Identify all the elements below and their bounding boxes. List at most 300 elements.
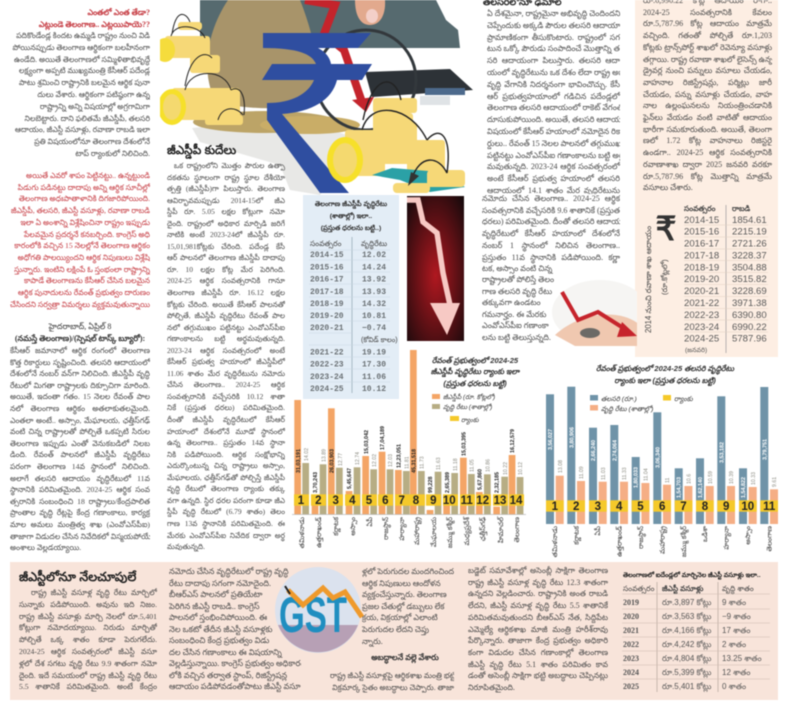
rank numbers: 10 [443, 495, 456, 507]
rank numbers: 3 [332, 495, 339, 507]
rows: 2015-16 [684, 227, 719, 238]
text block: per capita article continued: సంవత్సరానికి వచ్చేసరికి 9.6 శాతానికే (ప్రస్తుత [482, 206, 620, 215]
text block: intro paragraph: లక్ష్యంగా అప్పటి ముఖ్యమంత్రి కేసీఆర్ పదేండ్ల [19, 66, 150, 75]
text block: GST column four: డంతో అసెంబ్లీ సాక్షిగా భట్టి అబద్ధాలు చెప్పినట్లు [468, 671, 608, 680]
table rows: 13.25 శాతం [722, 654, 762, 663]
rank bands [546, 500, 778, 512]
icon: rupee glyph: ₹ [656, 210, 676, 247]
growth values: 11.05 [470, 459, 476, 472]
growth values: 10.33 [751, 472, 757, 485]
table rows: 2 శాతం [722, 640, 746, 649]
text block: red critique paragraph: అధోగతి పాలయ్యిందని ఆర్థిక నిపుణులు విశ్లేషి [18, 253, 150, 262]
table rows: 17 శాతం [722, 626, 750, 635]
table rows: 14.32 [362, 300, 386, 309]
legend: తలసరి (రూ.) [601, 396, 637, 403]
growth values: 11.63 [436, 457, 442, 470]
table rows: 11.06 [362, 373, 386, 382]
text block: transport revenue: వచ్చింది. గతంతో పోల్చితే రూ.1,203 [643, 31, 772, 40]
text block: transport revenue: వసూలు చేశారు. [643, 183, 693, 192]
text block: GST column four: నిరూపితమైంది. [468, 683, 515, 692]
rank numbers: 9 [723, 501, 729, 513]
per capita values: 1,54,822 [741, 477, 747, 498]
text block: per capita article continued: నంబర్ 1 స్థానంలో నిలిచిన తెలంగాణ.. [482, 241, 620, 250]
rows [684, 215, 767, 345]
GSDP values: 17,04,189 [380, 426, 386, 450]
rank numbers: 5 [637, 501, 644, 513]
rows: 2019-20 [684, 274, 719, 285]
rows: 6990.22 [732, 322, 767, 333]
text block: main article column one: అలాగే తలసరి ఆదాయం వృద్ధిరేటులో 11వ [10, 474, 150, 483]
text block: GSDP article: నికే (ప్రస్తుత ధరలు) పరిమితమైంది. [167, 403, 285, 412]
vertical caption: 2014 నుంచి రవాణా శాఖ ఆదాయం [644, 226, 653, 333]
text block: main article column one: రేటులో మిగతా రాష్ట్రాలకు దిక్సూచిగా మారింది. [10, 381, 150, 390]
table rows: 2024-25 [310, 385, 344, 394]
text block: GSDP article: నలో తగ్గుముఖం పట్టినట్టు ఎంవోఎస్‌పీఐ [167, 323, 285, 332]
text block: red critique paragraph: అయితే ఎవరో శాపం పెట్టినట్టు.. ఉన్నట్టుండి [26, 171, 150, 180]
text block: GST column four: లేదని, జీఎస్టీ వసూళ్ల వృద్ధి రేటు 5.5 శాతానికే [468, 601, 608, 610]
heading: GSDP rank chart title: జీఎస్డీపీ వృద్ధిరేటు ర్యాంకు ఇలా [431, 367, 519, 376]
text block: main article column one: అయితే, ఇదంతా గతం. 15 నెలల రేవంత్ పాల [10, 392, 150, 401]
per capita values: 3,56,027 [548, 429, 554, 450]
legend: వృద్ధి రేటు (శాతాల్లో) [443, 403, 493, 412]
text block: GST column one: రాష్ట్ర జీఎస్టీ వసూళ్లు మార్చి నెలలో రూ.5,401 [19, 612, 157, 621]
text block: GSDP article: ఎదుర్కొంటున్న చిన్న రాష్ట్రాలు అస్సాం, [167, 461, 285, 470]
text block: GSDP article: స్డీపీ రూ. 5.05 లక్షల కోట్లుగా నమో [167, 207, 285, 216]
text block: per capita article continued: నమోదు చేసిన తెలంగాణ.. 2024-25 ఆర్థిక [482, 194, 620, 203]
text block: transport revenue: డ్రైవర్ల నుంచి పన్నులు వసూలు చేయడం, [643, 66, 772, 75]
header: రాబడి [732, 204, 751, 213]
state labels [299, 516, 521, 548]
text block: GSDP article: మవుతున్నది. [167, 542, 205, 551]
rank numbers: 4 [349, 495, 356, 507]
table rows: 2021 [623, 626, 639, 635]
text block: main article column one: కొత్త రికార్డులు సృష్టించింది. తలసరి ఆదాయంలో [10, 358, 150, 367]
text block: GSDP article: గణాంకాలను బట్టి అర్థమవుతున్నది. [167, 334, 285, 343]
text block: GST column two: సంబంధించి కేంద్ర ప్రభుత్వం విడు [169, 636, 269, 645]
coins: right group [327, 82, 465, 193]
table title: (ప్రస్తుత ధరలను బట్టి..) [321, 224, 381, 233]
footnote: (జనవరి) [685, 347, 707, 354]
rows: 2016-17 [684, 238, 719, 250]
state labels [552, 525, 774, 557]
state labels: ఏపీ [594, 526, 602, 536]
rows: 6390.80 [732, 310, 767, 321]
text block: per capita article continued: వృద్ధిరేటులో కేసీఆర్ హయాంలో దేశంలోనే [482, 229, 620, 238]
table rows [623, 598, 762, 692]
image: red falling arrow on dark background [406, 195, 465, 342]
falling arrow [285, 586, 362, 617]
text block: transport revenue: చేయడం, పన్ను వసూళ్లు చేయడం, వాహ [643, 90, 772, 99]
text block: GST column one: పోల్చితే ఒక్క శాతం కూడా పెరుగలేదు. [19, 635, 157, 644]
image: falling per capita graph with hand [552, 280, 638, 346]
text block: GST column four: బడ్జెట్ సమావేశాల్లో అసెంబ్లీ సాక్షిగా తెలంగాణ [468, 566, 608, 575]
per capita values: 1,54,703 [677, 477, 683, 498]
text block: intro paragraph: ఉండేది. అయితే తెలంగాణలో సమ్మిళితాభివృద్ధే [14, 55, 150, 64]
text block: GSDP article: నాటికి అంటే 2023-24లో జీఎస్డీపీ రూ. [167, 230, 285, 239]
table header: వృద్ధిరేటు [361, 239, 388, 250]
growth values: 11.18 [453, 458, 459, 471]
text block: GST column two: పెరిగిన జీఎస్టీ రాబడి.. కాంగ్రెస్ [169, 602, 260, 610]
text block: main article column one: తాజాగా విడుదల చేసిన నివేదికలో విస్మయపోయే [10, 532, 150, 540]
heading: GSDP section: జీఎస్డీపీ కుదేలు [167, 143, 236, 157]
table rows: 17.30 [362, 360, 386, 370]
rank numbers: 10 [741, 501, 754, 513]
text block: intro paragraph: టాప్ ర్యాంకులో నిలిచింది. [75, 149, 150, 158]
text block: transport revenue: కోట్లకు ట్రాన్స్‌పోర్ట్ శాఖలో రెవెన్యూ వసూళ్లు [643, 43, 772, 52]
table rows: రూ.3,563 కోట్లు [662, 612, 712, 622]
text block: GST column one: కోట్లుగా నమోదయ్యాయి. నిరుడు మార్చితో [19, 623, 157, 632]
text block: per capita article: విషయంలో కేసీఆర్ హయాంలో నమోదైన రికా [487, 127, 620, 136]
table header [310, 239, 388, 250]
panel: peach transport revenue [635, 0, 778, 357]
rank numbers: 1 [552, 501, 559, 513]
text block: GST column four: జీఎస్టీ వృద్ధి రేటు 5.1 శాతం పరిమితం కావ [468, 660, 608, 669]
text block: GSDP article: కేసీఆర్ ప్రభుత్వ హయాంలో జీఎస్డీపీలో [167, 357, 285, 366]
bar chart: GSDP growth rank by state [292, 349, 526, 549]
text block: GSDP article: ఆవిర్భావమప్పుడు 2014-15లో జీఎ [167, 196, 285, 205]
text block: GSDP article: వగా ఉన్నది. స్థిర ధరల పరంగా కూడా జీఎ [167, 496, 285, 505]
growth values: 13.89 [322, 449, 328, 462]
heading: per capita rank chart title: రేవంత్ ప్రభుత్వంలో 2024-25 తలసరి వృద్ధిరేటు [596, 364, 734, 373]
table rows: 2023-24 [310, 373, 344, 382]
growth values [558, 460, 778, 487]
text block: main article column one: స్థానానికి పరిమితమైంది. 2024-25 ఆర్థిక సంవ [10, 485, 150, 494]
text block: main article column one: పరంగా తెలంగాణ 14వ స్థానంలో నిలిచింది. [10, 462, 150, 471]
rank numbers: 6 [382, 495, 389, 507]
rank numbers: 1 [298, 495, 305, 507]
text block: per capita article [486, 8, 621, 195]
text block: GSDP article: దీంతో జీఎస్డీపీ వృద్ధిరేటులో కేసీఆర్ [167, 415, 285, 424]
text block: GSDP article: 2024-25 ఆర్థిక సంవత్సరానికి గానూ [167, 276, 285, 285]
text block: GST column four: పేర్కొన్నారు. తాజాగా కేంద్ర ప్రభుత్వం అధికారి [468, 636, 608, 645]
legend: ర్యాంకు [674, 396, 693, 404]
state labels: తమిళనాడు [299, 516, 306, 548]
text block: GSDP article: పోల్చితే, జీఎస్డీపీ వృద్ధిరేటు రేవంత్ పాల [167, 311, 285, 320]
rank numbers: 2 [315, 495, 322, 507]
text block: GST column three: ఆర్థిక నిపుణులు ఆందోళన [362, 579, 441, 588]
text block: intro paragraph: పదికొండేండ్ల కిందట ఉమ్మడి రాష్ట్రం నుంచి విడి [16, 31, 150, 40]
red arrow [562, 292, 637, 337]
text block: first red subheading: ఎంతలో ఎంత తేడా? [87, 8, 150, 17]
text block: GST column one: దైంది. ఇదే సమయంలో రాష్ట్ర జీఎస్టీ వృద్ధి రేటు [19, 671, 157, 680]
text block: GST column three: ప్రజల చేతుల్లో డబ్బులు లేక [362, 602, 444, 611]
rows: 2023-24 [684, 322, 720, 333]
text block: red critique paragraph: పిడుగు పడినట్టు దాదాపు అన్ని ఆర్థిక సూచీల్లో [18, 183, 150, 192]
rank numbers: 12 [476, 495, 489, 507]
text block: red critique paragraph: జీఎస్డీపీ, తలసరి, జీఎస్టీ వసూళ్లు, రవాణా రాబడి [11, 206, 150, 215]
rank numbers: 4 [616, 501, 623, 513]
text block: GST column two: నెల ఒకటో తేదీన జీఎస్టీ వసూళ్లకు [169, 624, 272, 634]
covid note: (కోవిడ్ కాలం) [361, 336, 398, 344]
text block: transport revenue: నాల ఉల్లంఘనలను నియంత్రించడానికి [643, 101, 772, 110]
text block: intro paragraph: రాష్ట్రాన్ని అన్ని విషయాల్లో అగ్రగామిగా [40, 102, 150, 111]
text block: red critique paragraph: స్తున్నారు. ఇంటిని లక్షింపే ఓ స్తంభంలా రాష్ట్రాన్ని [14, 265, 150, 274]
rank numbers: 7 [680, 501, 687, 513]
rank numbers [552, 501, 776, 513]
text block: transport revenue: ఫైన్‌లు వేయడం వంటి వాటితో ఆదాయం [643, 113, 772, 122]
text block: GST column four [468, 566, 608, 694]
text block: GSDP article: 15,01,981కోట్లకు చేరింది. పదేండ్ల కేసీ [167, 242, 285, 251]
text block: GST column three [362, 566, 454, 648]
legend [432, 393, 495, 425]
state labels: మధ్యప్రదేశ్ [463, 516, 472, 545]
table rows: రూ.4,804 కోట్లు [662, 654, 712, 664]
table title [315, 199, 388, 233]
table rows: 2018-19 [310, 300, 344, 309]
table rows: 13.92 [362, 276, 386, 284]
rows: 2024-25 [684, 334, 719, 345]
text block: GST column three lower: విక్రమార్క సైతం అబద్ధాలు చెప్పారు. తాజా [332, 682, 454, 692]
rows: 3515.82 [732, 274, 767, 285]
text block: GST column four: రాష్ట్ర జీఎస్టీ వసూళ్ల వృద్ధి రేటు 12.3 శాతంగా [468, 578, 608, 587]
table rows: 2015-16 [310, 264, 344, 272]
table rows: రూ.4,242 కోట్లు [662, 640, 712, 650]
growth values: 11.03 [601, 467, 607, 480]
GSDP values: 12,23,051 [396, 444, 402, 468]
text block: transport revenue [642, 0, 773, 192]
text block: transport revenue: ణలో 1.72 కోట్ల వాహనాలు రిజిస్టరై [643, 136, 772, 145]
text block: GSDP article: దైంది. రాష్ట్రంలో అధికార మార్పిడి జరిగే [167, 219, 285, 228]
legend: వృద్ధి రేటు (శాతాల్లో) [601, 405, 653, 415]
panel: GSDP growth table [302, 194, 400, 400]
growth values: 10.22 [503, 462, 509, 475]
heading: per capita rank chart title: ర్యాంకు ఇలా (ప్రస్తుత ధరలను బట్టి) [614, 376, 716, 385]
GSDP values [296, 426, 516, 493]
text block: main article column one: అంశాలు వెల్లడయ్యాయి. [10, 543, 81, 552]
tan growth bars [302, 463, 523, 514]
text block: GST column one: 5.5 శాతానికే పరిమితమైంది. అంటే కేంద్రం [19, 682, 157, 691]
table rows: 2021-22 [310, 348, 344, 358]
text block: red critique paragraph: ఇలా ఏ అంశాన్ని విశ్లేషించినా రాష్ట్రం ఇప్పుడు [20, 218, 150, 227]
blue per capita bars [546, 387, 768, 524]
per capita values: 3,06,340 [655, 447, 661, 468]
table header: జీఎస్టీ వసూళ్లు [662, 584, 704, 595]
text block: intro paragraph: పాటు శ్రమించి రాష్ట్రానికి బలమైన ఆర్థిక పునా [19, 78, 150, 87]
text block: GST column two: బీఆర్ఎస్ పాలనలో ప్రతియేటా [169, 590, 262, 599]
GSDP values: 99,228 [428, 476, 434, 493]
table rows: రూ.5,401 కోట్లు [662, 682, 712, 692]
legend: జీఎస్డీపీ (రూ. కోట్లలో) [443, 393, 495, 402]
dark map background [200, 0, 460, 48]
rank numbers [298, 495, 523, 507]
text block: transport revenue: వాహనాల రిజిస్ట్రేషన్లు, పర్మిట్లు జారీ [643, 78, 772, 87]
text block: per capita article continued: టక, అస్సాం వంటి చిన్న [482, 264, 552, 273]
text block: GST column two: నమోదు చేసిన వృద్ధిరేటులో రాష్ట్ర వృద్ధి [169, 567, 289, 576]
heading: GSDP rank chart title: (ప్రస్తుత ధరలను బట్టి) [443, 379, 507, 388]
coin pile [193, 111, 360, 134]
text block: GST column one: రాష్ట్ర జీఎస్టీ వసూళ్ల వృద్ధి రేటు మార్చిలో [31, 588, 157, 597]
state labels: జమ్ము కశ్మీర్ [446, 517, 455, 548]
text block: red critique paragraph: చేసిందని సర్వత్రా విమర్శలు వ్యక్తమవుతున్నాయి. [10, 300, 150, 309]
growth values: 9.61 [772, 477, 778, 487]
rows: 1854.61 [732, 215, 767, 226]
text block: intro paragraph: నిలబెట్టారు. దాని ఫలితమే జీఎస్డీపీ, తలసరి [25, 114, 150, 123]
text block: red critique paragraph [10, 170, 151, 311]
rank numbers: 3 [595, 501, 601, 513]
text block: GST column one: సున్నాకు పడిపోయింది. అవును ఇది నిజం. [19, 600, 157, 609]
text block: GSDP article: గాణ 13వ స్థానానికి పరిమితమైంది. ఈ [167, 519, 285, 528]
text block: red critique paragraph: ఆర్థిక పునాదులను రేవంత్ ప్రభుత్వం దారుణం [18, 288, 150, 297]
text block: GSDP article: రూ. 10 లక్షల కోట్ల మేర పెరిగింది. [167, 265, 285, 274]
text block: GST column two: లోకి వచ్చిన తర్వాత స్టాంప్, రిజిస్ట్రేషన్ల [169, 670, 287, 680]
text block: GSDP article: నికి పడిపోయింది. ఆర్థిక సంక్షోభాన్ని [167, 450, 285, 459]
table rows: 10.12 [362, 385, 386, 394]
money bag [207, 0, 318, 108]
text block: intro paragraph: పోయినప్పుడు తెలంగాణ ఆర్థికంగా బలహీనంగా [12, 43, 150, 52]
state labels: రాజస్థాన్ [382, 517, 392, 540]
state labels: హర్యానా [399, 517, 407, 541]
state labels: తెలంగాణ [514, 517, 521, 542]
state labels: మహారాష్ట్ర [660, 526, 668, 554]
text block: GST column two: రేటు దాదాపు సగంగా నమోదైంది. [169, 578, 271, 588]
text block: per capita article continued: ప్రస్తుతం 11వ స్థానానికి పడిపోయింది. కర్ణా [482, 253, 620, 262]
text block: per capita article: పట్టినట్టు ఎంవోఎస్‌పీఐ గణాంకాలను బట్టి అర్థ [487, 151, 620, 160]
text block: per capita article: ఏ దేశమైనా, రాష్ట్రమైనా అభివృద్ధి చెందిందని [487, 9, 620, 18]
rows: 2215.19 [732, 227, 767, 238]
text block: main article column one: ఎంతలా అంటే.. అస్సాం, మేఘాలయ, ఛత్తీస్‌గఢ్ [10, 416, 150, 425]
text block: main article column one: నలో తెలంగాణ ఆర్థికం అతలాకుతలమైంది. [10, 404, 150, 413]
growth values: 11 [665, 478, 671, 483]
state labels: తెలంగాణ [766, 526, 774, 551]
rows: 2022-23 [684, 310, 719, 321]
table rows: −9 శాతం [722, 612, 751, 621]
rank numbers: 6 [659, 501, 665, 513]
text block: main article column one: ప్రాంతాల వృద్ధి రేట్లపై కేంద్ర గణాంకాలు, కార్యక్ర [10, 508, 150, 517]
growth values: 10.86 [486, 459, 492, 472]
header: సంవత్సరం [684, 204, 716, 214]
growth values: 12.02 [372, 454, 378, 467]
growth values: 10.39 [729, 471, 735, 484]
growth values: 11.04 [644, 468, 650, 481]
rank numbers: 13 [494, 495, 506, 507]
state labels: హిమాచల్ [497, 516, 505, 543]
heading: per capita rank chart title [596, 364, 736, 387]
GSDP values: 15,03,042 [364, 430, 370, 454]
text block: main article column one: దేశంలోనే నంబర్ వన్‌గా నిలిచింది. జీఎస్డీపీ వృద్ధి [10, 369, 150, 378]
rank bands [294, 494, 524, 506]
text block: GSDP article: త్పత్తి (జీఎస్డీపీ)గా పిలుస్తారు. తెలంగాణ [167, 184, 285, 193]
table rows: 12 శాతం [722, 668, 750, 677]
growth values: 11.33 [622, 467, 628, 480]
finger [355, 0, 385, 25]
text block: per capita article continued [482, 194, 620, 274]
GSDP values: 5,45,647 [347, 468, 353, 489]
text block: GST column two: వెల్లడిస్తున్నాయి. కాంగ్రెస్ ప్రభుత్వం అధికారం [169, 659, 301, 668]
growth values: 10.12 [518, 462, 524, 475]
table rows: 19.19 [362, 348, 386, 358]
table rows: 2025 [623, 682, 639, 691]
growth values: 10.6 [686, 474, 692, 484]
state labels: ఒడిశా [701, 526, 709, 542]
rows: 2020-21 [684, 286, 719, 297]
header [684, 204, 751, 214]
red falling arrow [305, 0, 374, 112]
table rows: 2020-21 [310, 324, 344, 333]
text block: GST column two [168, 566, 302, 693]
growth values: 11.81 [404, 456, 410, 469]
text block: intro paragraph [12, 31, 151, 160]
text block: GSDP article: ఒక రాష్ట్రంలోని మొత్తం పౌరుల ఉత్పా [174, 161, 285, 170]
panel: GST section [10, 562, 778, 700]
text block: intro paragraph: ప్రతి విషయంలోనూ తెలంగాణ దేశంలోనే [34, 137, 150, 146]
rank numbers: 2 [573, 501, 579, 513]
GSDP values: 5,67,860 [478, 469, 484, 490]
rows: 3504.88 [732, 262, 767, 273]
GSDP values: 2,65,389 [445, 472, 451, 493]
table header: సంవత్సరం [310, 239, 342, 249]
text block: per capita article: వృద్ధి వేగానికి నిదర్శనంగా భావించొచ్చు. కేసీ [487, 80, 620, 89]
text block: per capita article beside graphic [482, 274, 554, 344]
text block: main article column one: మాల అమలు మంత్రిత్వ శాఖ (ఎంవోఎస్‌పీఐ) [10, 520, 150, 529]
table rows [310, 251, 386, 394]
text block: per capita article beside graphic: గాణ తలసరి వృద్ధి రేటు [482, 287, 552, 296]
rank numbers: 11 [763, 501, 776, 513]
state labels: అస్సాం [350, 516, 358, 536]
state labels: రాజస్థాన్ [637, 526, 647, 549]
GSDP values: 2,32,185 [494, 472, 500, 493]
per capita values [548, 427, 768, 498]
text block: GST column two: దల చేసిన గణాంకాలు ఈ విషయాన్ని [169, 648, 282, 656]
text block: GST column two: పాలనలో స్తంభించిపోయింది. ఈ [169, 613, 267, 622]
per capita values: 3,80,906 [569, 427, 575, 448]
growth values: 11.73 [420, 456, 426, 469]
table rows: 2022-23 [310, 360, 344, 370]
state labels: తమిళనాడు [552, 525, 559, 557]
text block: main article column one: కేసీఆర్ జమానాలో ఆర్థిక రంగంలో తెలంగాణ [10, 346, 150, 355]
text block: GSDP article: దకతను స్థూలంగా రాష్ట్ర స్థూల దేశీయో [167, 173, 285, 182]
text block: main article column one: డింది. రేవంత్ పాలనలో జీఎస్డీపీ వృద్ధిరేటు [10, 450, 150, 459]
GSDP values: 31,03,191 [296, 449, 302, 473]
rows: 5787.96 [732, 334, 767, 345]
text block: GST column two: ఆదాయం పడిపోవడంతోపాటు జీఎస్టీ వసూ [169, 682, 301, 691]
table rows: −0.74 [362, 324, 386, 333]
text block: GSDP article: స్డీపీ వృద్ధి రేటులో (6.79 శాతం) తెలం [167, 507, 285, 516]
table rows: 13.93 [362, 288, 386, 297]
state labels: ఛత్తీస్‌గఢ్ [479, 517, 488, 541]
state labels: ఉత్తరాఖండ్ [616, 526, 624, 557]
text block: dateline: హైదరాబాద్, ఏప్రిల్ 8 [49, 322, 111, 331]
coins in palm [580, 328, 600, 338]
orange GSDP bars [294, 350, 515, 514]
table rows: 2024 [623, 668, 639, 677]
text block: main article column one: తెలంగాణ ఇప్పుడు ఎంతో వెనుకబడిలో నిలబ [10, 439, 150, 448]
text block: per capita article continued: ధరలు) పరిమితమైంది. దీంతో తలసరి ఆదాయ [482, 217, 620, 226]
rows: 3228.37 [732, 250, 767, 261]
state labels: మహారాష్ట్ర [414, 517, 422, 545]
growth values: 12.77 [338, 453, 344, 466]
text block: GSDP article: వృద్ధి రేటులో తెలంగాణ ర్యాంకు తక్కు [167, 484, 285, 493]
state labels: కర్ణాటక [574, 526, 582, 545]
per capita values: 3,79,751 [762, 439, 768, 460]
text block: per capita article beside graphic: గమనార్హం. ఈ మేరకు [482, 310, 546, 319]
coins: left group [155, 14, 244, 125]
table header: వృద్ధి శాతం [722, 584, 754, 595]
table rows: 2023 [623, 654, 639, 663]
text block: red critique paragraph: తెలంగాణ అధఃపాతాళానికి దిగజారిపోయింది. [19, 194, 150, 203]
table rows: 12.02 [362, 251, 386, 260]
rank numbers: 8 [702, 501, 709, 513]
text block: GST column three: పెరుగుదల లేదని చెప్తు [362, 625, 429, 634]
magnifying glass [316, 30, 416, 130]
text block: GSDP article: సంవత్సరానికి వచ్చేసరికి 10.12 శాతా [167, 392, 285, 401]
table rows: 2019-20 [310, 312, 344, 321]
state labels: ఏపీ [366, 517, 374, 527]
text block: transport revenue: ఉండగా.. 2024-25 ఆర్థిక సంవత్సరానికి [643, 148, 772, 157]
table rows: రూ.3,897 కోట్లు [662, 598, 712, 608]
text block: GSDP article: తెలంగాణ జీఎస్డీపీ రూ. 16.12 లక్షల [167, 288, 285, 297]
text block: GSDP article: ఆర్ పాలనలో తెలంగాణ జీఎస్డీపీ దాదాపు [167, 253, 285, 262]
text block: intro paragraph: ఆదాయం, జీఎస్టీ వసూళ్లు, రవాణా రాబడి ఇలా [15, 125, 150, 134]
